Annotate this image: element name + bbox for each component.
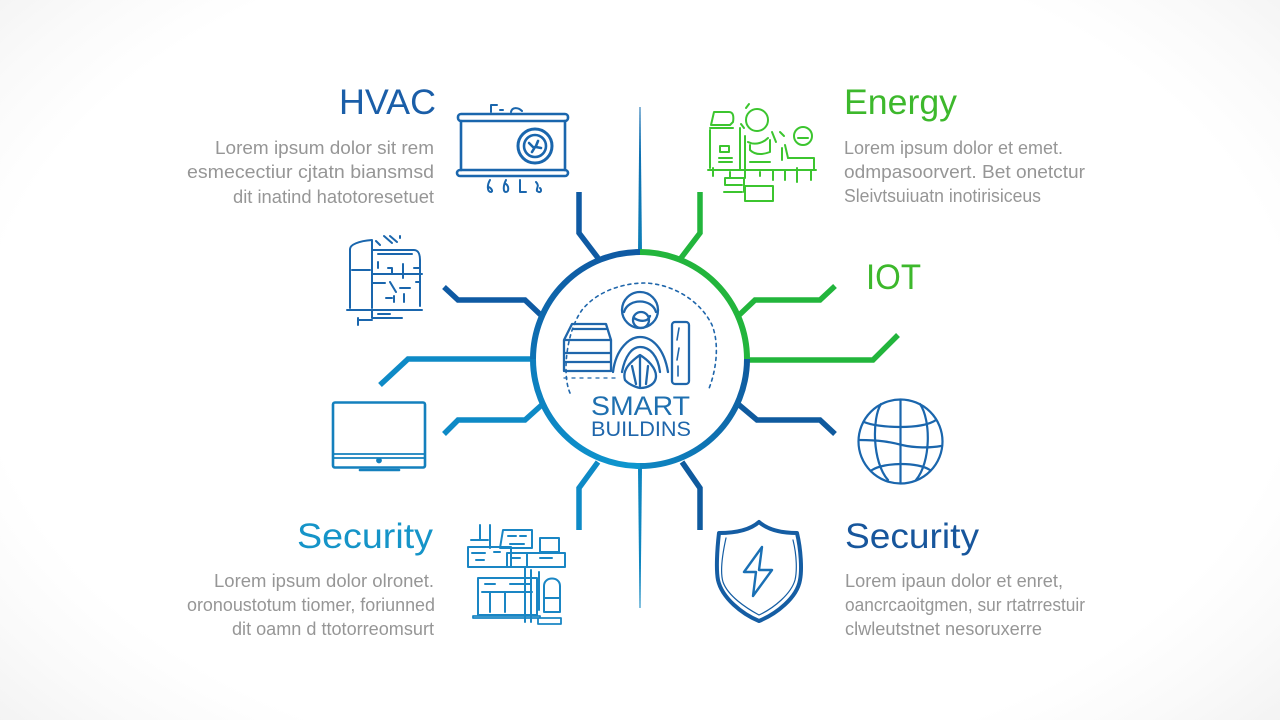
text block: Security right description: oancrcaoitgmen, sur rtatrrestuir xyxy=(845,595,1085,615)
heading: Energy: Energy xyxy=(844,83,957,122)
icon: energy equipment xyxy=(708,104,816,201)
base dots xyxy=(564,377,618,379)
connector: left lower xyxy=(444,402,545,434)
connector: bottom left xyxy=(579,462,598,530)
connector: bottom right xyxy=(682,462,700,530)
person head xyxy=(622,292,658,328)
heading: IOT: IOT xyxy=(866,258,921,297)
text block: HVAC description: esmecectiur cjtatn biansmsd xyxy=(187,162,434,182)
heading: HVAC: HVAC xyxy=(339,83,436,122)
leaf xyxy=(624,355,656,388)
text block: Security left description xyxy=(187,571,435,639)
icon: HVAC unit xyxy=(457,105,568,192)
icon: shield with bolt xyxy=(717,522,801,621)
text block: HVAC description: dit inatind hatotoresetuet xyxy=(233,187,434,207)
icon: building plan xyxy=(347,236,422,325)
building xyxy=(564,324,611,371)
hub title: smart: SMART xyxy=(591,391,690,421)
text block: Security left description: Lorem ipsum dolor olronet. xyxy=(214,571,434,591)
dotted orbit xyxy=(566,283,716,393)
connector: top left xyxy=(579,192,598,258)
heading: Security right: Security xyxy=(845,517,980,556)
connector: bottom centre spine xyxy=(638,468,642,608)
text block: Energy description xyxy=(844,138,1085,206)
connector: top centre spine xyxy=(638,107,642,252)
hub title: buildings: BUILDINS xyxy=(591,418,691,441)
connector: right lower xyxy=(738,404,835,434)
text block: Energy description: odmpasoorvert. Bet onetctur xyxy=(844,162,1085,182)
hub emblem: smart building illustration xyxy=(564,283,716,393)
icon: globe xyxy=(858,400,942,484)
text block: HVAC description xyxy=(187,138,434,207)
tower xyxy=(672,322,689,384)
connector: left upper xyxy=(444,287,545,319)
connector: left middle xyxy=(380,359,532,385)
central hub ring xyxy=(533,252,747,466)
icon: monitor xyxy=(333,402,425,470)
heading: Security left: Security xyxy=(297,517,434,556)
text block: Security left description: oronoustotum tiomer, foriunned xyxy=(187,595,435,615)
connector: top right xyxy=(681,192,700,258)
text block: Energy description: Sleivtsuiuatn inotirisiceus xyxy=(844,186,1041,206)
text block: Security right description: clwleutstnet nesoruxerre xyxy=(845,619,1042,639)
icon: city block xyxy=(468,525,565,624)
text block: Security right description: Lorem ipaun dolor et enret, xyxy=(845,571,1063,591)
text block: Security left description: dit oamn d ttotorreomsurt xyxy=(232,619,434,639)
arch xyxy=(613,337,668,372)
connector: right upper xyxy=(735,286,835,319)
connector: right middle xyxy=(748,335,898,360)
text block: HVAC description: Lorem ipsum dolor sit rem xyxy=(215,138,434,158)
connector lines xyxy=(380,107,898,608)
text block: Energy description: Lorem ipsum dolor et emet. xyxy=(844,138,1063,158)
text block: Security right description xyxy=(845,571,1085,639)
